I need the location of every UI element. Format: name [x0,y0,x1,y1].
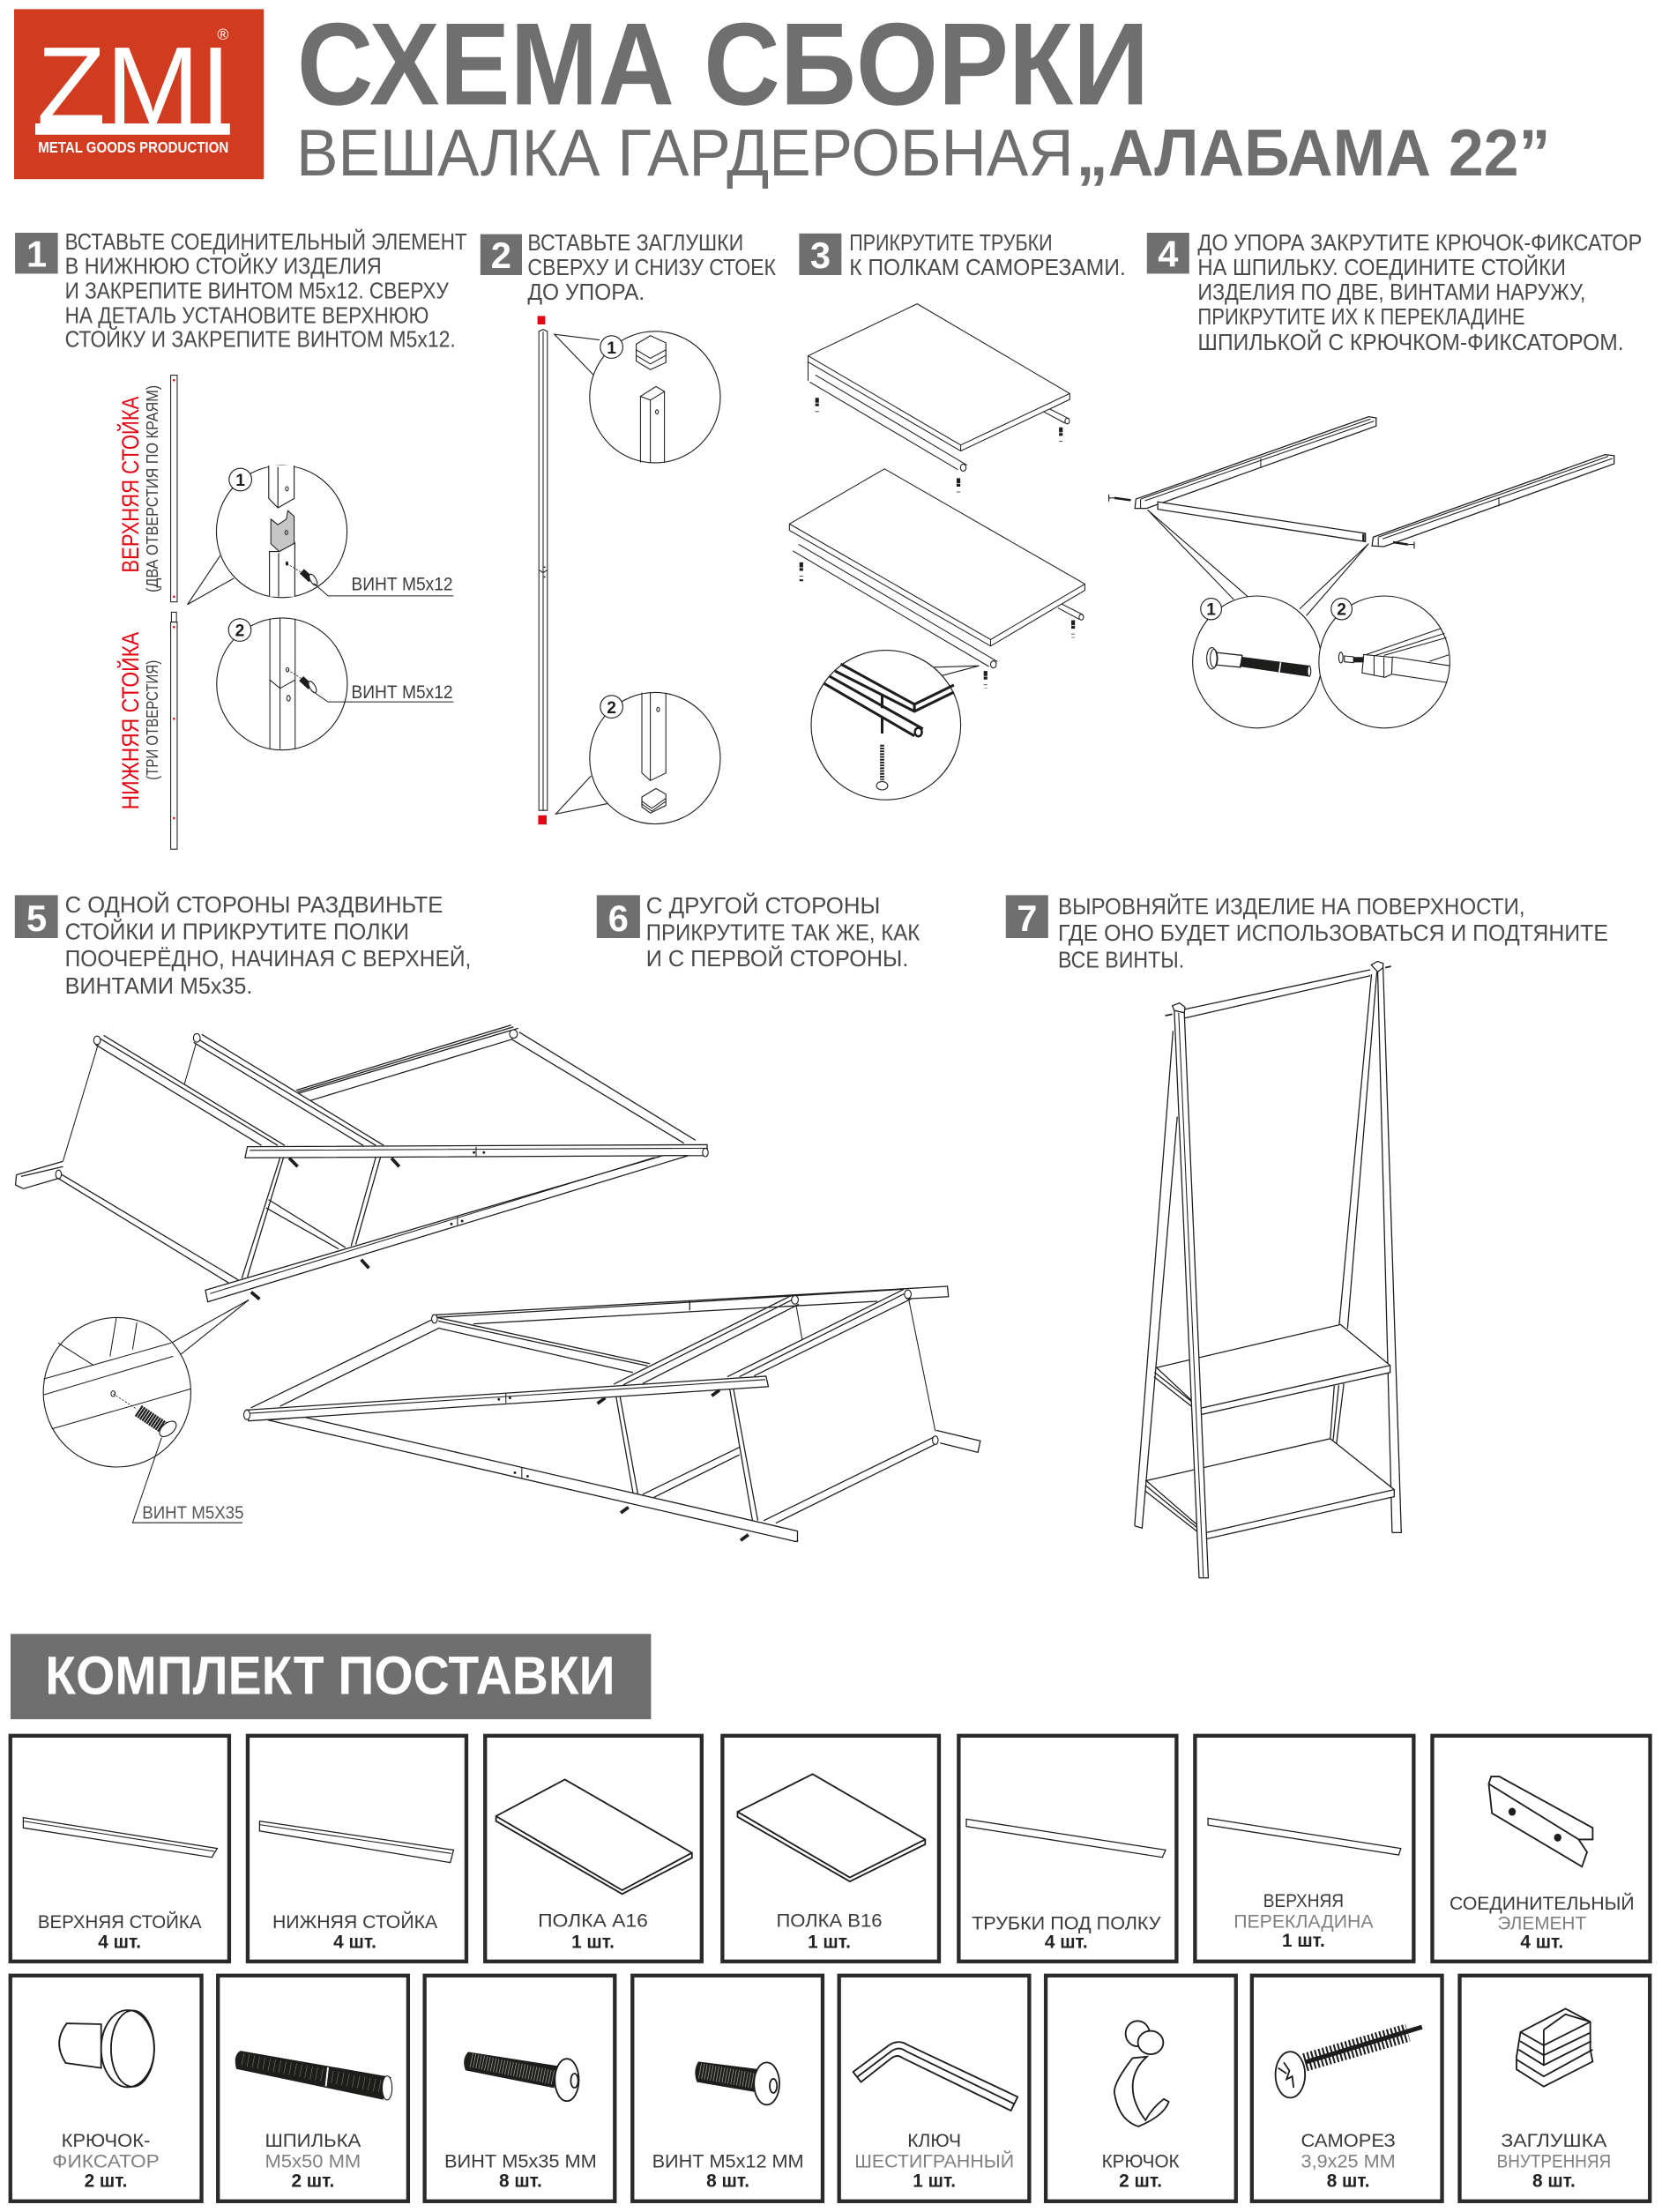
detail 1: connector insertion [187,465,347,605]
part: shelf tubes: 4 шт. [1045,1933,1088,1953]
step 7 number [1006,895,1048,939]
part: screw M5x35: 8 шт. [499,2171,542,2192]
step 3 number [799,234,841,276]
part: shelf B16 [722,1736,939,1962]
badge 2: 2 [235,622,244,641]
step 5 number [15,895,58,939]
part: top crossbar: 1 шт. [1282,1931,1325,1951]
step 7 text: ВСЕ ВИНТЫ. [1058,949,1184,973]
part: hex key: ШЕСТИГРАННЫЙ [854,2149,1014,2171]
label: lower post [116,632,161,809]
part: shelf tubes [958,1736,1176,1962]
part: connector: СОЕДИНИТЕЛЬНЫЙ [1450,1892,1635,1914]
callout: screw M5x12 upper: ВИНТ М5х12 [351,573,453,595]
detail 2: joined posts [217,618,347,750]
detail 1: top plug [555,331,720,463]
step 1 text: ВСТАВЬТЕ СОЕДИНИТЕЛЬНЫЙ ЭЛЕМЕНТ [65,228,467,255]
step 5 text [65,891,471,999]
part: lower post: 4 шт. [333,1933,376,1953]
detail: screw M5x35 [43,1300,249,1467]
part: top crossbar: ВЕРХНЯЯ [1263,1889,1344,1911]
step 2 text: ДО УПОРА. [527,280,645,305]
detail 2: knob on post [1300,544,1450,728]
frame parts [1109,417,1614,548]
step 2 text: СВЕРХУ И СНИЗУ СТОЕК [527,256,776,280]
part: inner plug: ВНУТРЕННЯЯ [1497,2149,1611,2171]
part: screw M5x35 [425,1976,615,2201]
step 6 [243,892,980,1541]
step 6 text: И С ПЕРВОЙ СТОРОНЫ. [646,945,908,972]
part: hook [1046,1976,1236,2201]
step 1 number [15,233,58,274]
part: screw M5x12: 8 шт. [706,2171,749,2192]
badge 1 [1201,599,1221,620]
part: shelf A16: ПОЛКА А16 [538,1910,648,1932]
part: hex key [839,1976,1029,2201]
badge 2: 2 [1337,601,1346,620]
step 5 number: 5 [26,897,47,939]
label: upper post: ВЕРХНЯЯ СТОЙКА [116,397,144,573]
step 7 text: ГДЕ ОНО БУДЕТ ИСПОЛЬЗОВАТЬСЯ И ПОДТЯНИТЕ [1058,921,1608,946]
part: upper post: ВЕРХНЯЯ СТОЙКА [38,1910,202,1933]
part: screw M5x35: ВИНТ М5х35 ММ [444,2149,597,2171]
lower post drawing [171,612,177,849]
badge 2 [228,619,251,641]
step 1 text: В НИЖНЮЮ СТОЙКУ ИЗДЕЛИЯ [65,252,382,279]
part: self-tapping screw: 8 шт. [1327,2171,1370,2192]
step 5 text: СТОЙКИ И ПРИКРУТИТЕ ПОЛКИ [65,919,409,945]
part: self-tapping screw: САМОРЕЗ [1301,2129,1396,2151]
step 3 text: ПРИКРУТИТЕ ТРУБКИ [849,231,1053,256]
part: hook: 2 шт. [1119,2171,1162,2192]
badge 1 [229,468,251,491]
step 2 text: ВСТАВЬТЕ ЗАГЛУШКИ [527,231,743,256]
part: self-tapping screw: 3,9х25 ММ [1301,2149,1396,2171]
callout: screw M5x12 lower [312,681,453,703]
badge 1 [600,336,622,358]
part: fixing knob: ФИКСАТОР [52,2149,160,2171]
step 7 text [1058,893,1608,973]
part: inner plug [1460,1976,1650,2201]
kit section heading: КОМПЛЕКТ ПОСТАВКИ [45,1646,615,1706]
part: screw M5x12 [632,1976,823,2201]
logo: ZMI [37,25,231,147]
step 6 text [646,892,920,972]
badge 1: 1 [607,339,616,358]
step 4 text: НА ШПИЛЬКУ. СОЕДИНИТЕ СТОЙКИ [1197,254,1566,280]
label: lower post: (ТРИ ОТВЕРСТИЯ) [143,660,161,780]
part: hook: КРЮЧОК [1102,2149,1180,2171]
kit section heading [11,1634,651,1719]
step 4 text: ПРИКРУТИТЕ ИХ К ПЕРЕКЛАДИНЕ [1197,305,1525,330]
step 1 number: 1 [26,233,47,274]
step 3 text [849,231,1126,280]
assembled clothes rack [1135,961,1401,1578]
part: fixing knob: КРЮЧОК- [62,2129,150,2151]
part: threaded stud: ШПИЛЬКА [265,2129,361,2151]
step 7 number: 7 [1017,897,1037,939]
step 3 text: К ПОЛКАМ САМОРЕЗАМИ. [849,256,1126,280]
part: lower post: НИЖНЯЯ СТОЙКА [272,1910,438,1933]
step 4 text: ИЗДЕЛИЯ ПО ДВЕ, ВИНТАМИ НАРУЖУ, [1197,280,1585,305]
badge 1: 1 [1206,601,1216,620]
part: hex key: КЛЮЧ [907,2129,961,2151]
detail: screw into tube [811,651,979,800]
part: screw M5x12: ВИНТ М5х12 ММ [652,2149,804,2171]
step 7 [1006,893,1608,1578]
step 3 number: 3 [810,235,831,276]
step 2 number [481,235,522,276]
part: fixing knob [11,1976,202,2201]
callout: screw M5x12 lower: ВИНТ М5х12 [351,681,453,703]
part: connector [1432,1736,1651,1962]
part: inner plug: ЗАГЛУШКА [1501,2129,1607,2151]
subtitle: „АЛАБАМА 22” [1077,115,1550,190]
step 5 [15,891,708,1523]
part: self-tapping screw [1252,1976,1442,2201]
part: threaded stud: 2 шт. [291,2171,334,2192]
step 4 number: 4 [1158,233,1178,274]
step 3 [789,231,1126,800]
step 4 number [1147,233,1189,274]
label: upper post [116,385,161,592]
step 1 text: СТОЙКУ И ЗАКРЕПИТЕ ВИНТОМ М5х12. [65,326,456,353]
step 6 number [597,895,640,939]
part: top crossbar [1195,1736,1413,1962]
label: lower post: НИЖНЯЯ СТОЙКА [116,632,144,809]
part: inner plug: 8 шт. [1532,2171,1576,2192]
part: shelf A16 [485,1736,702,1962]
part: connector: 4 шт. [1520,1933,1563,1953]
step 5 text: ПООЧЕРЁДНО, НАЧИНАЯ С ВЕРХНЕЙ, [65,945,471,972]
step 1 text: И ЗАКРЕПИТЕ ВИНТОМ М5х12. СВЕРХУ [65,279,449,303]
detail 2: bottom plug [555,692,720,824]
badge 2: 2 [607,699,616,718]
part: threaded stud [218,1976,408,2201]
callout: screw M5x35 [132,1437,243,1523]
step 4 [1109,231,1642,728]
upper shelf with tubes [808,304,1069,495]
step 4 text: ШПИЛЬКОЙ С КРЮЧКОМ-ФИКСАТОРОМ. [1197,329,1624,355]
part: top crossbar: ПЕРЕКЛАДИНА [1233,1910,1374,1933]
frame drawing, second side [243,1286,980,1541]
step 1 [15,228,467,849]
step 5 text: ВИНТАМИ М5х35. [65,974,252,999]
logo: ® [217,26,228,43]
part: shelf B16: ПОЛКА В16 [776,1910,882,1932]
badge 2 [1331,599,1352,620]
part: lower post [248,1736,466,1962]
badge 2 [600,696,622,718]
long post with red plugs [538,316,548,824]
logo [14,9,264,179]
logo: METAL GOODS PRODUCTION [38,138,228,156]
part: upper post [11,1736,229,1962]
lower shelf with tubes [789,469,1084,689]
part: fixing knob: 2 шт. [85,2171,127,2192]
callout: screw M5x35: ВИНТ М5Х35 [142,1503,243,1523]
part: threaded stud: М5х50 ММ [265,2149,361,2171]
subtitle [296,115,1550,190]
step 2 text [527,231,776,305]
step 1 text: НА ДЕТАЛЬ УСТАНОВИТЕ ВЕРХНЮЮ [65,303,429,328]
step 1 text [65,228,467,353]
step 6 number: 6 [608,897,629,939]
upper post drawing [171,376,177,602]
step 2 number: 2 [491,235,511,276]
step 6 text: ПРИКРУТИТЕ ТАК ЖЕ, КАК [646,921,920,946]
badge 1: 1 [235,472,245,490]
label: upper post: (ДВА ОТВЕРСТИЯ ПО КРАЯМ) [143,385,161,592]
part: hex key: 1 шт. [913,2171,956,2192]
step 7 text: ВЫРОВНЯЙТЕ ИЗДЕЛИЕ НА ПОВЕРХНОСТИ, [1058,893,1525,920]
detail 1: knob on stud [1148,510,1322,728]
part: shelf B16: 1 шт. [808,1933,851,1953]
part: connector: ЭЛЕМЕНТ [1497,1911,1586,1933]
frame drawing, first side [16,1025,708,1302]
subtitle: ВЕШАЛКА ГАРДЕРОБНАЯ [296,115,1074,190]
part: shelf tubes: ТРУБКИ ПОД ПОЛКУ [972,1911,1161,1933]
part: shelf A16: 1 шт. [571,1933,615,1953]
step 2 [481,231,776,824]
step 6 text: С ДРУГОЙ СТОРОНЫ [646,892,880,919]
step 5 text: С ОДНОЙ СТОРОНЫ РАЗДВИНЬТЕ [65,891,443,918]
title: СХЕМА СБОРКИ [297,0,1149,130]
part: upper post: 4 шт. [98,1933,141,1953]
step 4 text [1197,231,1642,355]
callout: screw M5x12 upper [314,573,453,596]
